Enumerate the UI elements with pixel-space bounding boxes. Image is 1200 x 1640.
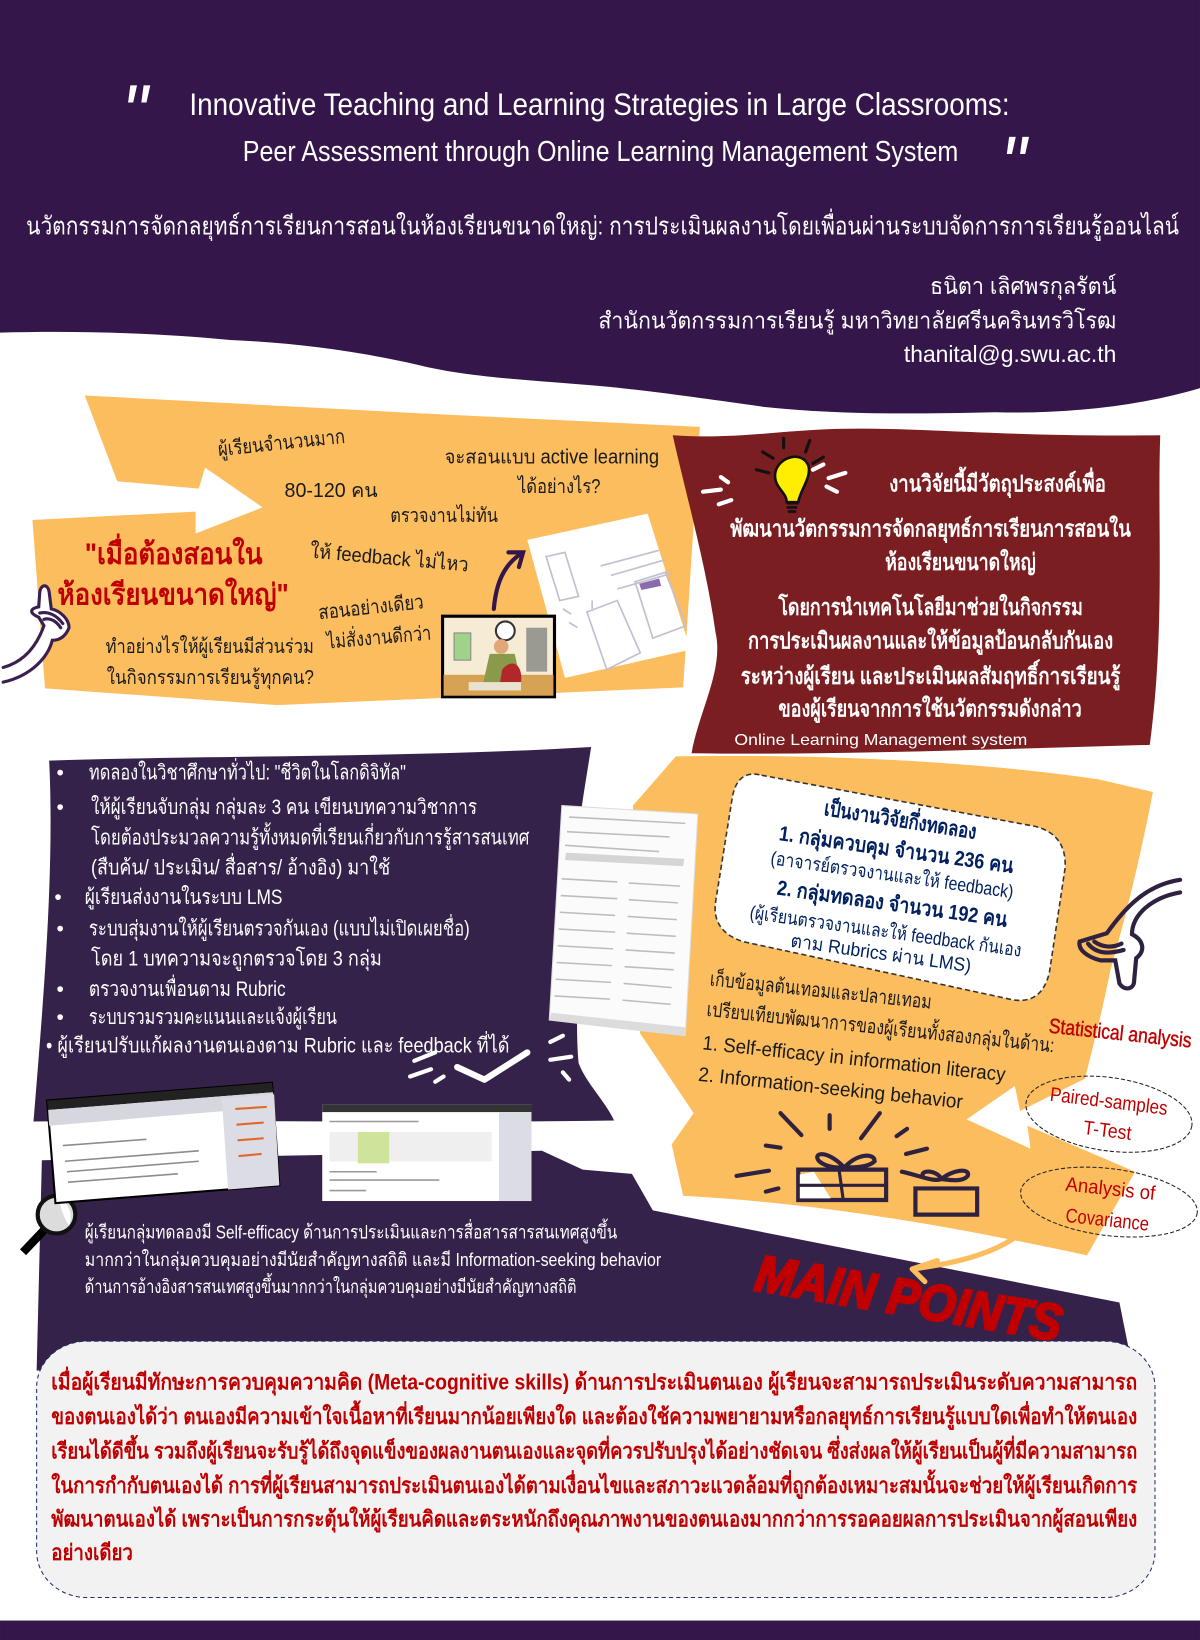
method list: โดยต้องประมวลความรู้ทั้งหมดที่เรียนเกี่ยวกับการรู้สารสนเทศ [91, 822, 530, 850]
objective text: การประเมินผลงานและให้ข้อมูลป้อนกลับกันเอง [748, 627, 1113, 656]
closing quote mark: " [1000, 120, 1029, 208]
picture: rubric document [549, 806, 698, 1036]
objective text: ระหว่างผู้เรียน และประเมินผลสัมฤทธิ์การเรียนรู้ [741, 659, 1121, 691]
callout: analysis of covariance: Covariance [1065, 1205, 1150, 1236]
method list: ให้ผู้เรียนจับกลุ่ม กลุ่มละ 3 คน เขียนบทความวิชาการ [91, 795, 477, 820]
panel: problem in large classrooms [3, 395, 700, 705]
results text [85, 1219, 661, 1299]
objective text: งานวิจัยนี้มีวัตถุประสงค์เพื่อ [889, 467, 1106, 499]
results text: ด้านการอ้างอิงสารสนเทศสูงขึ้นมากกว่าในกลุ่มควบคุมอย่างมีนัยสำคัญทางสถิติ [85, 1273, 576, 1299]
method list: โดย 1 บทความจะถูกตรวจโดย 3 กลุ่ม [91, 947, 382, 972]
title: Innovative Teaching and Learning Strategies in Large Classrooms: [189, 87, 1010, 122]
method list: • [57, 796, 64, 819]
data collection text: 1. Self-efficacy in information literacy [701, 1032, 1007, 1086]
callout: design box: ตาม Rubrics ผ่าน LMS) [789, 930, 973, 976]
method list: ระบบสุ่มงานให้ผู้เรียนตรวจกันเอง (แบบไม่เปิดเผยชื่อ) [89, 913, 470, 941]
callout: design box [715, 774, 1065, 1000]
method list: • [57, 1006, 64, 1029]
question: many students: ทำอย่างไรให้ผู้เรียนมีส่วนร่วม [106, 635, 314, 659]
question: many students: สอนอย่างเดียว [317, 591, 425, 624]
method list: • [57, 978, 64, 1001]
footer band [0, 1621, 1200, 1640]
icon: gift boxes [737, 1113, 977, 1215]
picture: LMS screenshot workshop [322, 1105, 531, 1201]
panel: results [23, 1151, 1130, 1371]
method list: ตรวจงานเพื่อนตาม Rubric [89, 974, 286, 1001]
method list: • [57, 761, 64, 784]
icon: document sheet [527, 514, 690, 678]
panel: research design [633, 756, 1180, 1255]
question: many students: ให้ feedback ไม่ไหว [309, 540, 470, 576]
method list [46, 757, 530, 1058]
question: many students: ผู้เรียนจำนวนมาก [217, 426, 346, 462]
objective text: ห้องเรียนขนาดใหญ่ [885, 548, 1036, 576]
question: many students: 80-120 คน [285, 480, 378, 502]
icon: magnifier [23, 1196, 75, 1252]
icon: light bulb [703, 438, 845, 512]
callout: paired samples test: T-Test [1082, 1117, 1133, 1145]
data collection text: 2. Information-seeking behavior [697, 1064, 964, 1113]
author block [598, 273, 1117, 367]
heading: when teaching large classes: "เมื่อต้องสอนใน [85, 533, 263, 571]
question: many students [106, 426, 659, 690]
title [189, 87, 1010, 167]
objective text: โดยการนำเทคโนโลยีมาช่วยในกิจกรรม [778, 593, 1083, 620]
author block: ธนิตา เลิศพรกุลรัตน์ [930, 273, 1117, 300]
question: many students: ได้อย่างไร? [516, 475, 601, 498]
conclusion text: อย่างเดียว [51, 1540, 133, 1565]
question: many students: ตรวจงานไม่ทัน [390, 504, 498, 527]
panel: method steps [33, 747, 614, 1122]
header band [0, 0, 1200, 413]
heading: main points: MAIN POINTS [751, 1245, 1066, 1352]
method list: ระบบรวมรวมคะแนนและแจ้งผู้เรียน [89, 1006, 337, 1030]
objective text: ของผู้เรียนจากการใช้นวัตกรรมดังกล่าว [778, 695, 1082, 724]
callout: design box: 1. กลุ่มควบคุม จำนวน 236 คน [778, 822, 1016, 879]
icon: pointing hand [3, 586, 69, 682]
method list: • [57, 917, 64, 940]
data collection text: เก็บข้อมูลต้นเทอมและปลายเทอม [709, 966, 933, 1015]
method list: (สืบค้น/ ประเมิน/ สื่อสาร/ อ้างอิง) มาใช้ [91, 853, 390, 880]
callout: paired samples test [1021, 1066, 1197, 1162]
data collection text: เปรียบเทียบพัฒนาการของผู้เรียนทั้งสองกลุ่มในด้าน: [706, 995, 1056, 1058]
system label: Online Learning Management system [734, 732, 1027, 749]
panel: main points conclusion [37, 1341, 1155, 1598]
conclusion text [51, 1365, 1137, 1565]
data collection text [697, 966, 1056, 1113]
arrow: curved to document [494, 552, 523, 609]
heading: when teaching large classes: ห้องเรียนขนาดใหญ่" [58, 578, 289, 613]
callout: design box: (ผู้เรียนตรวจงานและให้ feedback กันเอง [748, 902, 1023, 962]
results text: มากกว่าในกลุ่มควบคุมอย่างมีนัยสำคัญทางสถิติ และมี Information-seeking behavior [85, 1249, 661, 1272]
question: many students: ไม่สั่งงานดีกว่า [324, 619, 432, 654]
callout: design box: เป็นงานวิจัยกึ่งทดลอง [823, 792, 979, 844]
method list: • [54, 886, 62, 909]
callout: analysis of covariance: Analysis of [1065, 1174, 1157, 1205]
question: many students: ในกิจกรรมการเรียนรู้ทุกคน? [107, 666, 314, 690]
callout: analysis of covariance [1017, 1158, 1200, 1246]
author block: thanital@g.swu.ac.th [904, 341, 1116, 367]
picture: LMS screenshot course [47, 1083, 279, 1203]
callout: paired samples test: Paired-samples [1049, 1084, 1169, 1120]
callout: design box: (อาจารย์ตรวจงานและให้ feedback) [769, 847, 1015, 902]
method list: • ผู้เรียนปรับแก้ผลงานตนเองตาม Rubric และ feedback ที่ได้ [46, 1030, 510, 1058]
method list: ทดลองในวิชาศึกษาทั่วไป: "ชีวิตในโลกดิจิทัล" [89, 757, 406, 784]
method list: ผู้เรียนส่งงานในระบบ LMS [85, 885, 282, 910]
title: Peer Assessment through Online Learning Management System [243, 135, 958, 167]
heading: when teaching large classes [58, 533, 289, 613]
callout: design box: 2. กลุ่มทดลอง จำนวน 192 คน [775, 877, 1009, 933]
icon: check mark [410, 1036, 571, 1082]
author block: สำนักนวัตกรรมการเรียนรู้ มหาวิทยาลัยศรีนครินทรวิโรฒ [598, 308, 1116, 335]
arrow: swoosh to main points [912, 1238, 1015, 1282]
objective text [730, 467, 1131, 724]
picture: overwhelmed teacher [443, 616, 554, 697]
results text: ผู้เรียนกลุ่มทดลองมี Self-efficacy ด้านการประเมินและการสื่อสารสารสนเทศสูงขึ้น [85, 1219, 617, 1245]
panel: research objective [673, 429, 1160, 754]
opening quote mark: " [121, 69, 150, 157]
question: many students: จะสอนแบบ active learning [445, 446, 659, 468]
icon: pointing hand [1079, 880, 1180, 988]
